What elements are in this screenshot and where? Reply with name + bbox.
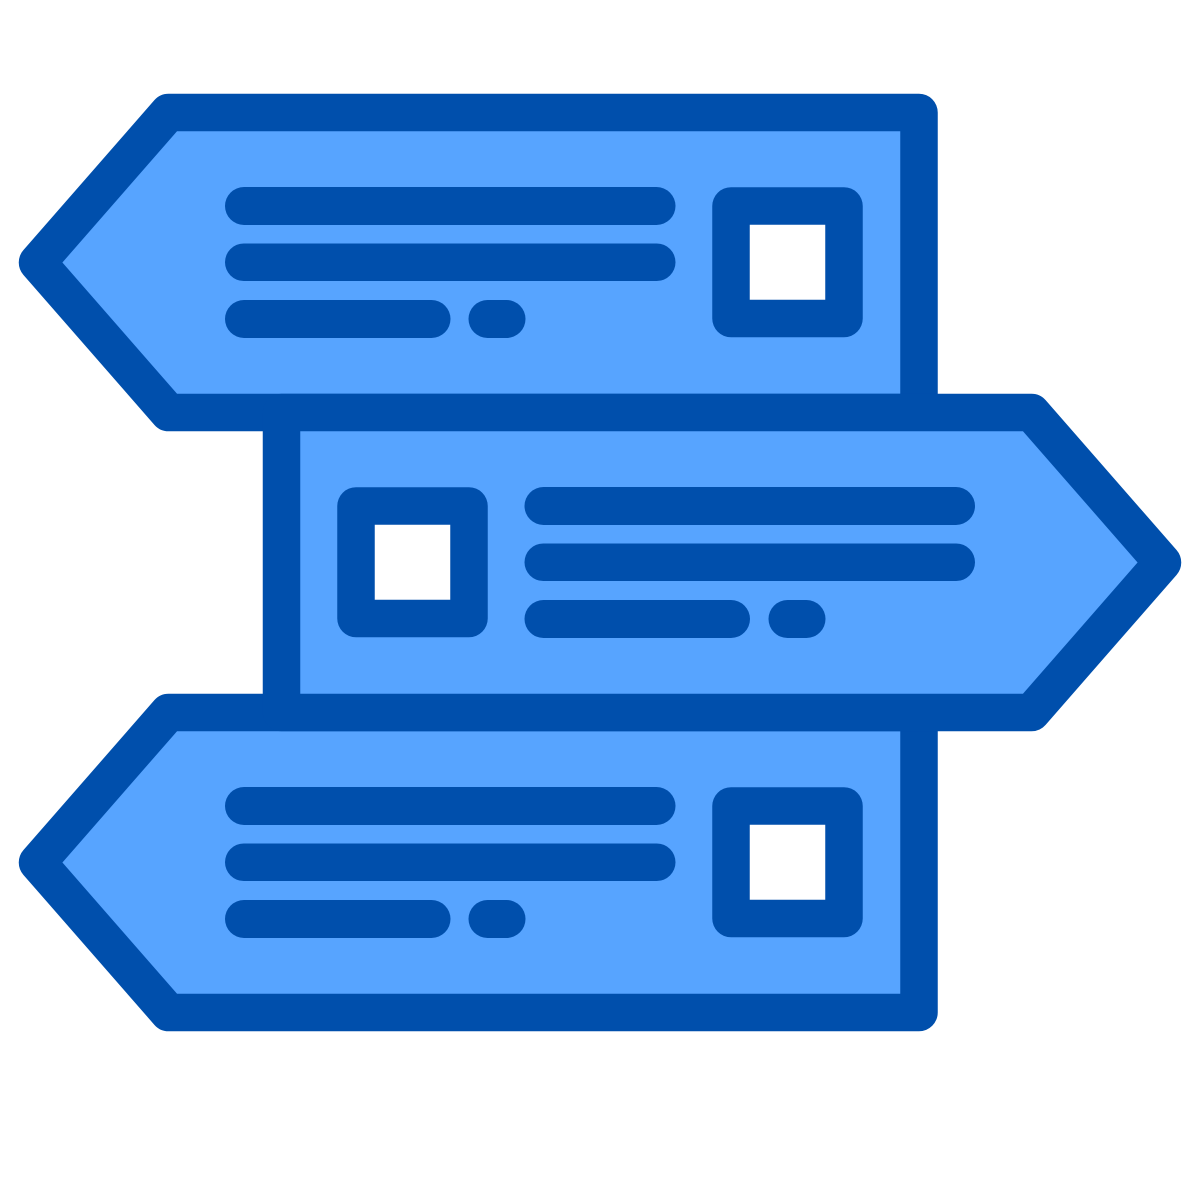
panel: bottom left-pointing arrow — [38, 712, 919, 1012]
icon: white square — [731, 206, 844, 318]
icon: white square — [731, 806, 844, 918]
panel: top left-pointing arrow — [38, 112, 919, 412]
text lines — [225, 787, 676, 938]
text lines — [225, 187, 676, 338]
arrow body — [38, 112, 919, 412]
icon: white square — [356, 506, 469, 618]
arrow body — [282, 412, 1162, 712]
text lines — [524, 487, 975, 638]
arrow body — [38, 712, 919, 1012]
panel: middle right-pointing arrow — [282, 412, 1162, 712]
